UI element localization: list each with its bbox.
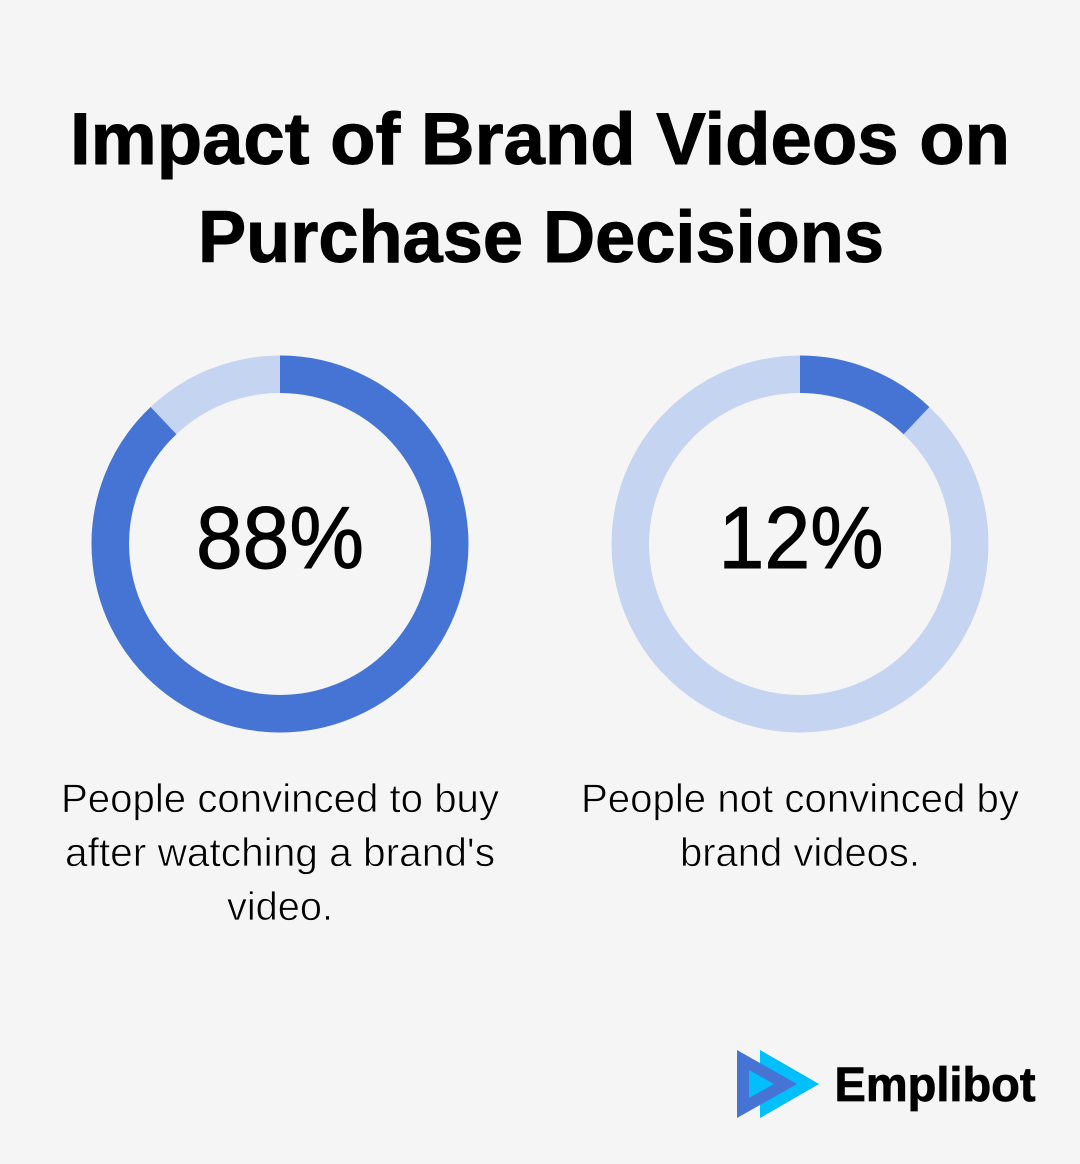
- title: Impact of Brand Videos on: [70, 99, 1010, 180]
- value: 88%: 88%: [196, 488, 364, 587]
- description: convinced: video.: [227, 885, 333, 929]
- description: not convinced: People not convinced by: [581, 777, 1019, 821]
- title: Purchase Decisions: [198, 197, 884, 278]
- panel: 12% not convinced: [581, 374, 1019, 875]
- wordmark: Emplibot: [834, 1059, 1036, 1112]
- title: [70, 99, 1010, 278]
- description: not convinced: [581, 777, 1019, 875]
- donut chart: 12%: [630, 374, 970, 714]
- value: 12%: 12%: [718, 488, 884, 587]
- donut chart: 88%: [110, 374, 450, 714]
- description: convinced: [61, 777, 499, 929]
- logo: Emplibot: [737, 1050, 1036, 1118]
- icon: play triangles: [737, 1050, 819, 1118]
- description: convinced: after watching a brand's: [65, 831, 495, 875]
- description: convinced: People convinced to buy: [61, 777, 499, 821]
- description: not convinced: brand videos.: [680, 831, 920, 875]
- panel: 88% convinced: [61, 374, 499, 929]
